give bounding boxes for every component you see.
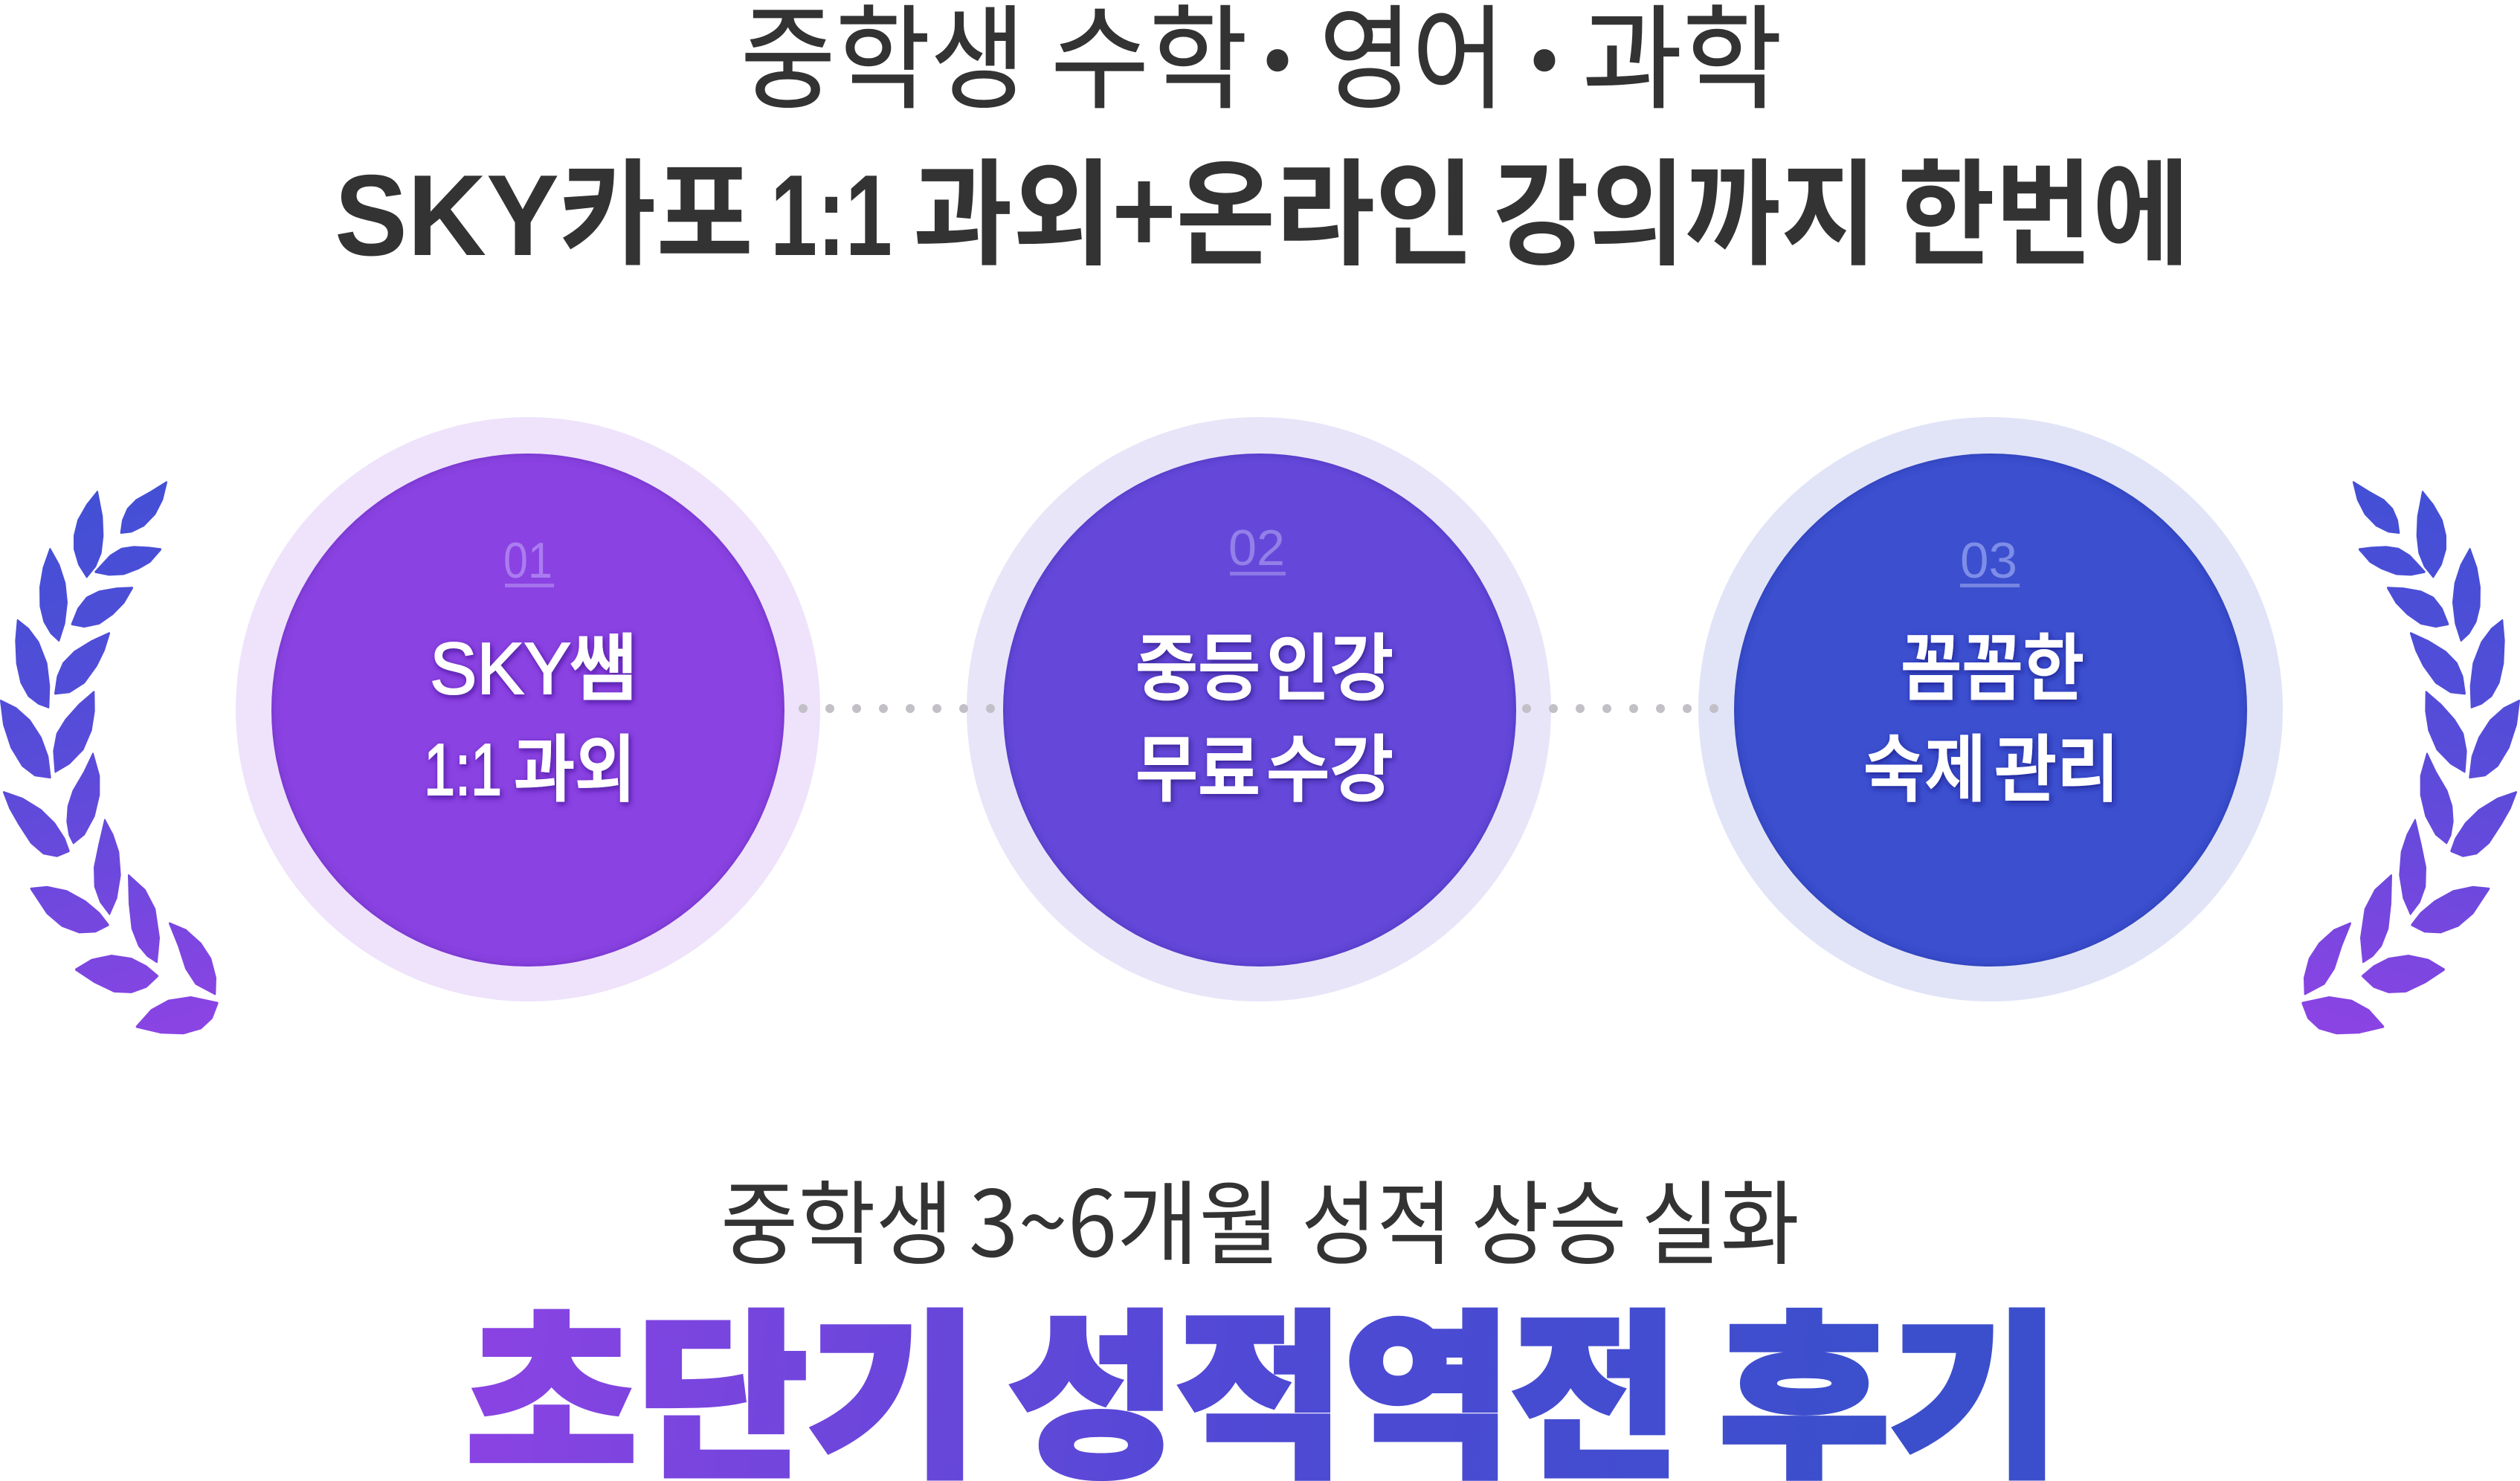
label: SKY쌤 1:1 과외: SKY xyxy=(430,627,571,709)
subtitle: 3~6 months results: 3~6개월 xyxy=(969,1151,1280,1283)
icon: left laurel wreath xyxy=(1,483,218,1033)
connector dots between step 1 and 2 xyxy=(799,704,995,713)
connector dots between step 2 and 3 xyxy=(1522,704,1718,713)
subtitle: 3~6 months results: 상승 xyxy=(1471,1151,1627,1283)
label: SKY쌤 1:1 과외: 과외 xyxy=(514,711,636,816)
title: main headline: 강의까지 xyxy=(1493,121,1877,288)
title: main headline: 카포 xyxy=(559,121,753,288)
panel: step 02 circle xyxy=(967,417,1551,1001)
title: main headline: 한번에 xyxy=(1898,121,2190,288)
title: main headline xyxy=(335,121,2190,288)
title: main headline: 1:1 xyxy=(770,151,892,280)
subtitle: 3~6 months results: 실화 xyxy=(1641,1151,1799,1283)
label: 꼼꼼한 숙제 관리: 숙제 xyxy=(1863,711,1986,816)
title: subjects line xyxy=(741,0,1782,136)
panel: step 01 circle xyxy=(236,417,820,1001)
label: 중등 인강 무료 수강: 무료 xyxy=(1135,711,1260,816)
step number 03: 03 xyxy=(1960,532,2017,589)
subtitle: 3~6 months results: 성적 xyxy=(1301,1151,1452,1283)
step number 01: 01 xyxy=(503,532,552,589)
label: 꼼꼼한 숙제 관리: 꼼꼼한 xyxy=(1901,610,2084,715)
subtitle: 3~6 months results xyxy=(721,1151,1799,1283)
heading: gradient headline xyxy=(466,1255,2060,1481)
title: main headline: SKY xyxy=(335,151,559,280)
panel: step 03 circle xyxy=(1698,417,2283,1001)
title: main headline: 과외+온라인 xyxy=(913,121,1475,288)
label: SKY쌤 1:1 과외 xyxy=(424,610,637,816)
label: 중등 인강 무료 수강: 수강 xyxy=(1266,711,1393,816)
subtitle: 3~6 months results: 중학생 xyxy=(721,1151,953,1283)
label: SKY쌤 1:1 과외: 쌤 xyxy=(570,610,637,715)
label: 꼼꼼한 숙제 관리 xyxy=(1863,610,2119,816)
label: 중등 인강 무료 수강 xyxy=(1135,610,1393,816)
icon: right laurel wreath xyxy=(2302,483,2519,1033)
step number 02: 02 xyxy=(1228,520,1285,576)
label: 꼼꼼한 숙제 관리: 관리 xyxy=(1994,711,2119,816)
label: 중등 인강 무료 수강: 중등 xyxy=(1135,610,1260,715)
label: 중등 인강 무료 수강: 인강 xyxy=(1266,610,1393,715)
label: SKY쌤 1:1 과외: 1:1 xyxy=(424,729,502,810)
